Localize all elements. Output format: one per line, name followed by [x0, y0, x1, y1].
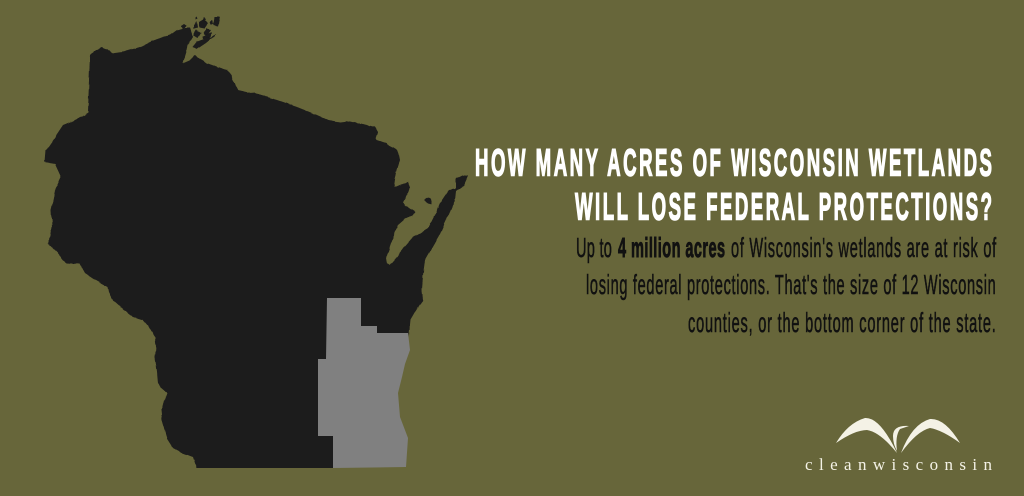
body text	[576, 232, 997, 338]
body text: Up to	[576, 232, 612, 263]
state outline in black	[45, 16, 468, 472]
heading: WILL LOSE FEDERAL PROTECTIONS?	[575, 186, 992, 228]
highlighted bottom corner counties in grey	[318, 298, 410, 468]
Apostle Islands	[213, 17, 220, 26]
body text: losing federal protections. That's the size of 12 Wisconsin	[586, 269, 996, 300]
body text: counties, or the bottom corner of the state.	[688, 307, 996, 338]
wordmark: cleanwisconsin	[805, 455, 992, 474]
body text: 4 million acres	[618, 232, 725, 263]
heading	[475, 142, 992, 228]
logo: Clean Wisconsin	[805, 418, 992, 474]
map: Wisconsin state	[45, 16, 468, 478]
Washington Island	[424, 197, 432, 204]
icon: bird wings	[836, 418, 960, 453]
heading: HOW MANY ACRES OF WISCONSIN WETLANDS	[475, 142, 992, 184]
body text: of Wisconsin's wetlands are at risk of	[731, 232, 997, 263]
